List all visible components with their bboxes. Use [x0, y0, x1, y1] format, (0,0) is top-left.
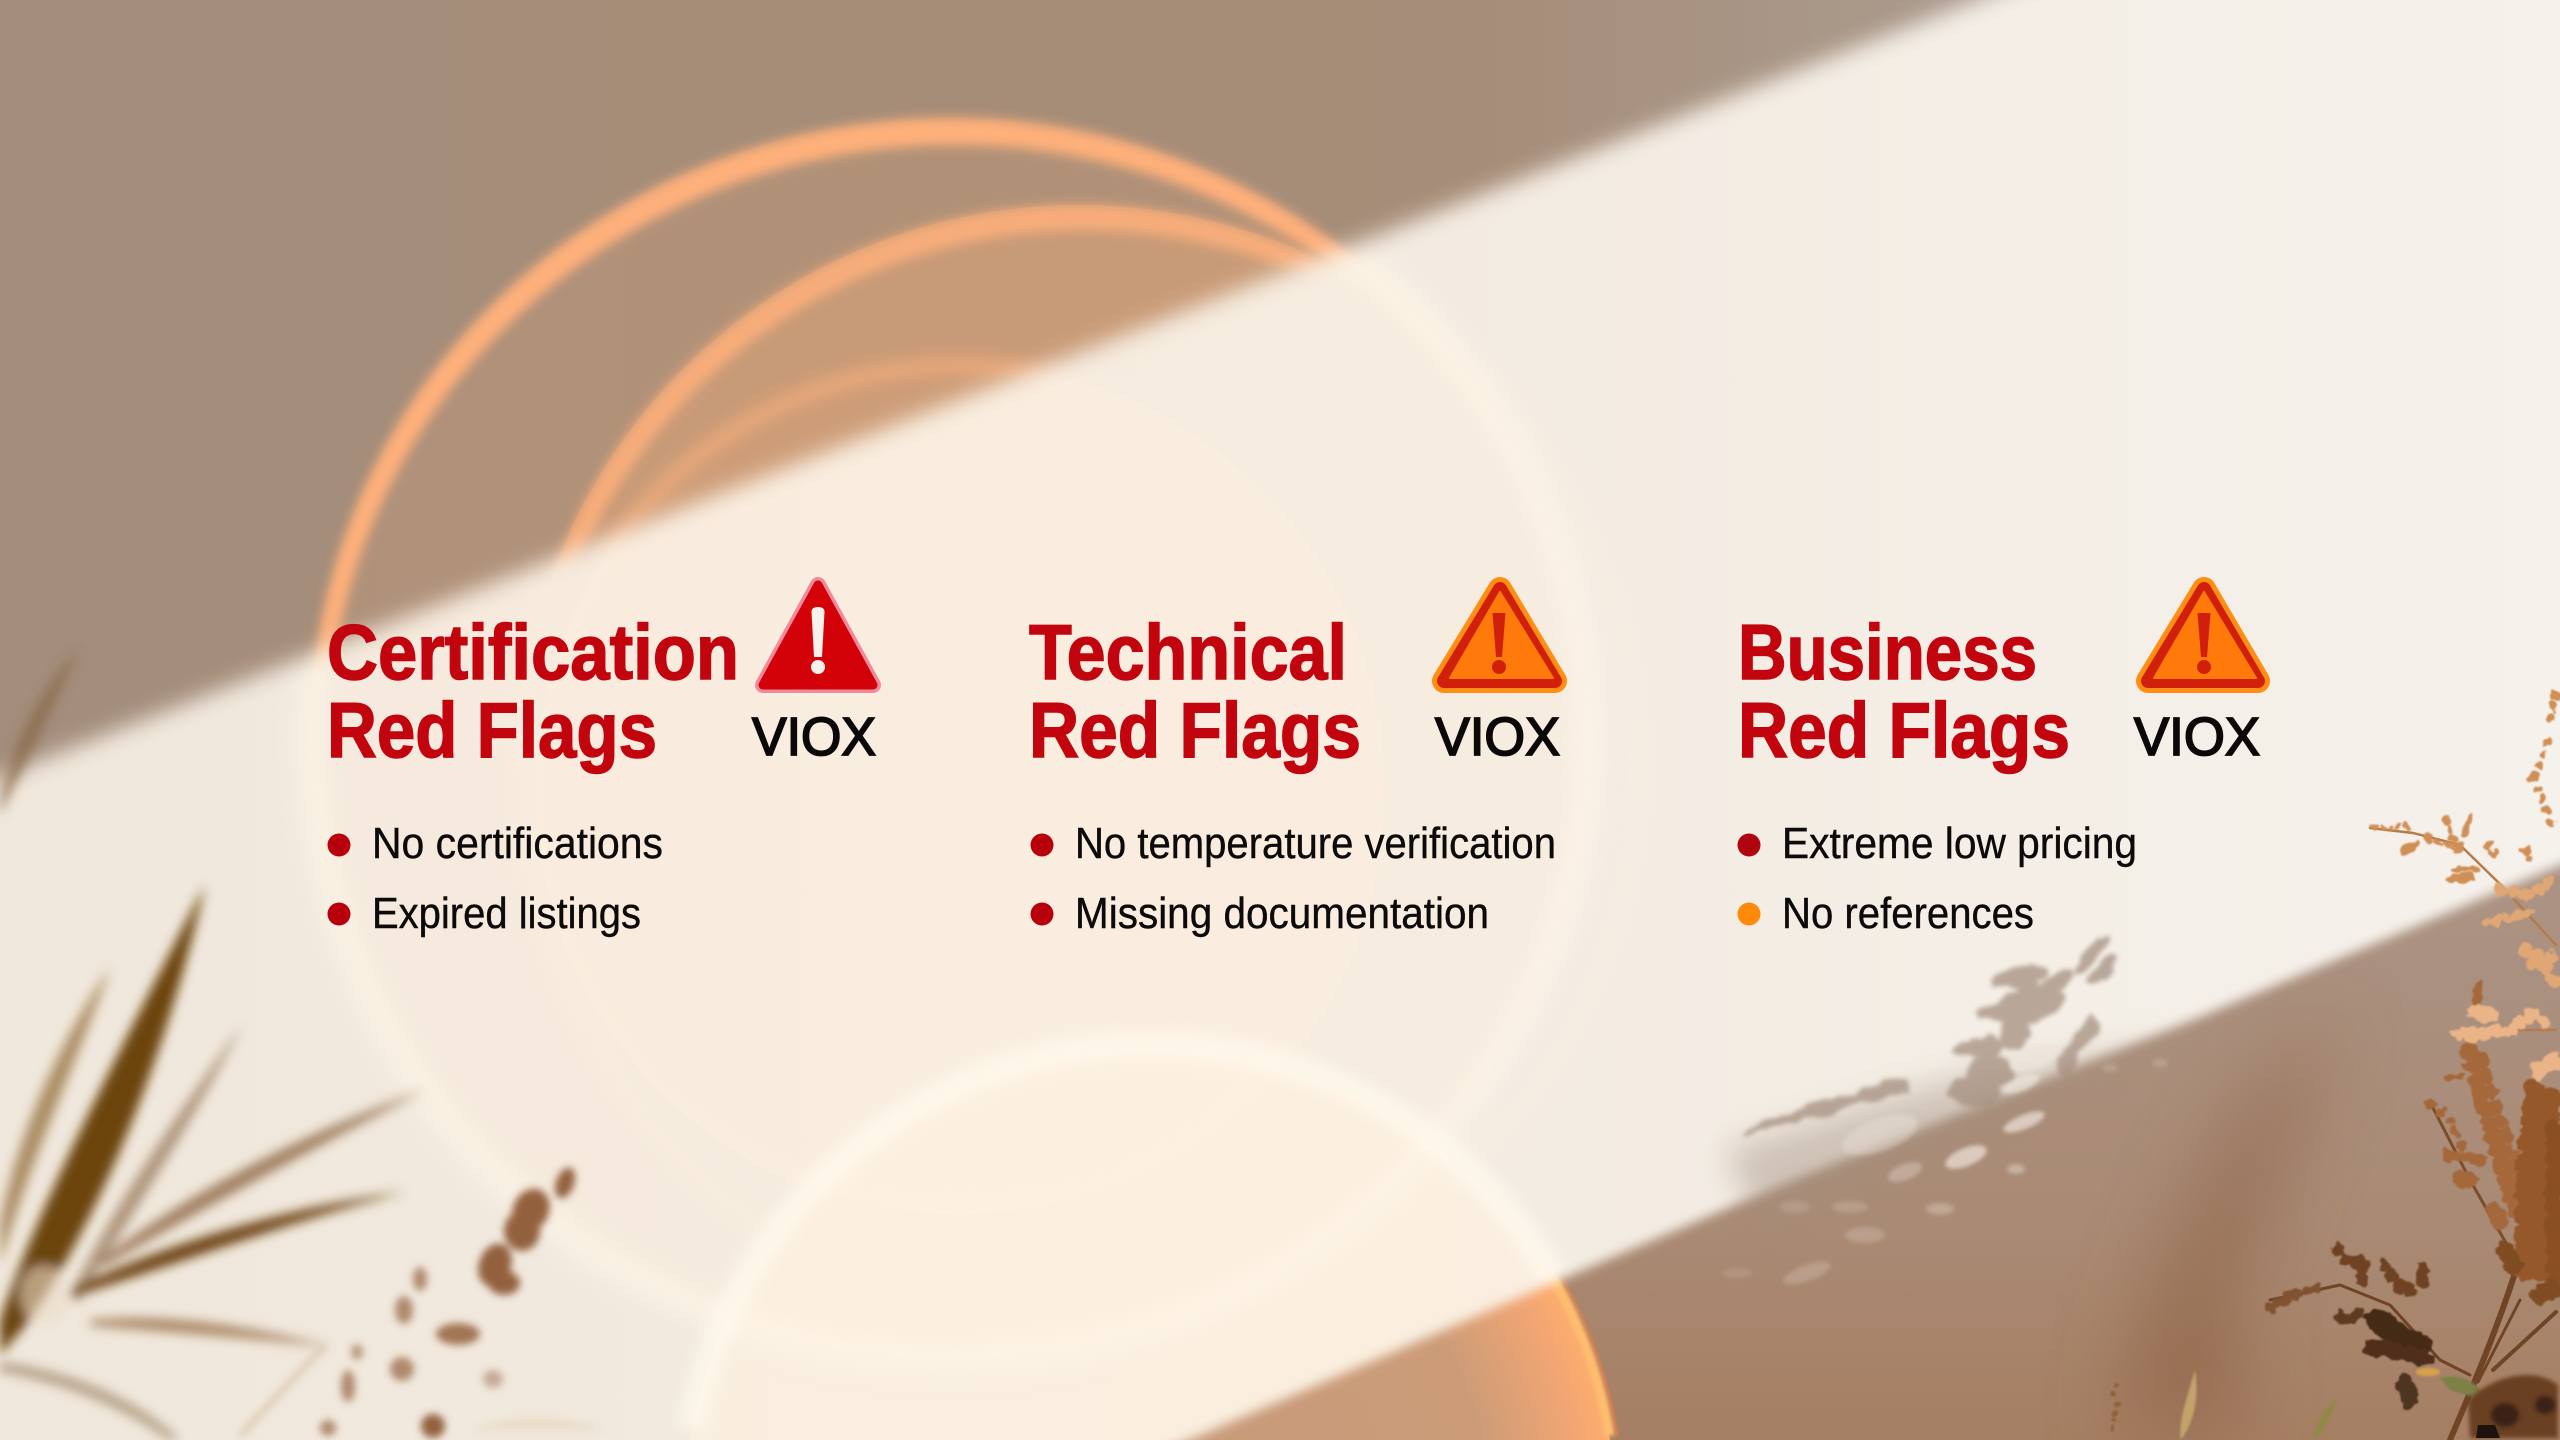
icon: orange warning triangle — [1444, 589, 1555, 681]
heading: certification red flags — [327, 608, 739, 774]
panel: certification red flags — [327, 585, 876, 938]
icon: red warning triangle — [763, 585, 873, 685]
heading: technical red flags — [1029, 608, 1361, 774]
heading: certification red flags: Red Flags — [327, 686, 657, 774]
brand label: VIOX — [2134, 707, 2260, 767]
heading: certification red flags: Certification — [327, 608, 739, 696]
brand label: VIOX — [752, 707, 876, 767]
heading: technical red flags: Red Flags — [1029, 686, 1361, 774]
left plant: blurred dried grass — [240, 1165, 610, 1438]
left plant: blurred palm blades — [0, 650, 425, 1440]
icon: orange warning triangle — [2148, 589, 2258, 681]
light rings on sunlit wall — [310, 118, 1639, 1440]
heading: business red flags — [1738, 608, 2070, 774]
bullet: no certifications: No certifications — [372, 819, 663, 868]
bullet: expired listings: Expired listings — [372, 889, 641, 938]
panel: technical red flags — [1029, 589, 1560, 938]
bullet: no temperature verification: No temperature verification — [1075, 819, 1556, 868]
lower-right shadow band — [1171, 857, 2560, 1440]
upper-left shadow band with orange rings — [0, 0, 2014, 790]
panel: business red flags — [1738, 589, 2260, 938]
brand label: VIOX — [1435, 707, 1560, 767]
heading: business red flags: Red Flags — [1738, 686, 2070, 774]
heading: business red flags: Business — [1738, 608, 2037, 696]
right plant: dried flowers — [2112, 695, 2558, 1440]
cast leaf shadow on wall — [1722, 933, 2170, 1289]
bullet: extreme low pricing: Extreme low pricing — [1782, 819, 2137, 868]
bullet: missing documentation: Missing documentation — [1075, 889, 1489, 938]
heading: technical red flags: Technical — [1029, 608, 1347, 696]
bullet: no references: No references — [1782, 889, 2034, 938]
